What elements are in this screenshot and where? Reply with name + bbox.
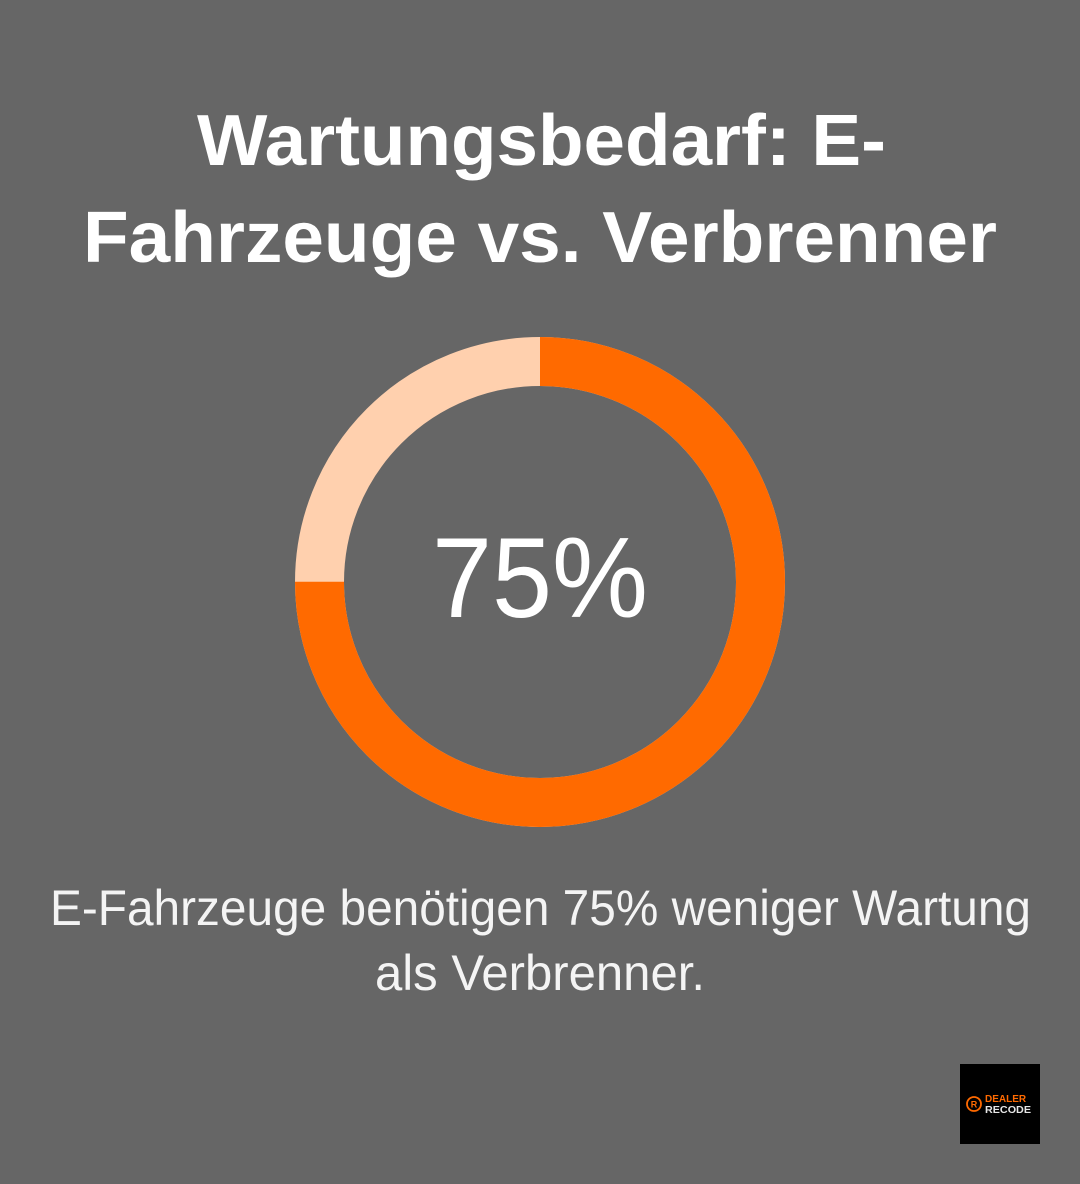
title: Wartungsbedarf: E- (197, 101, 886, 181)
center value: 75% (432, 515, 648, 642)
title (83, 101, 997, 278)
donut chart: 75% (320, 362, 760, 802)
logo: Dealer Recode (960, 1064, 1040, 1144)
title: Fahrzeuge vs. Verbrenner (83, 198, 997, 278)
description text: als Verbrenner. (375, 945, 705, 1001)
logo: Dealer Recode: RECODE (985, 1105, 1031, 1116)
logo: Dealer Recode: R (971, 1100, 978, 1110)
description text: E-Fahrzeuge benötigen 75% weniger Wartung (50, 880, 1031, 936)
logo: Dealer Recode: DEALER (985, 1094, 1027, 1105)
description text (50, 880, 1031, 1001)
